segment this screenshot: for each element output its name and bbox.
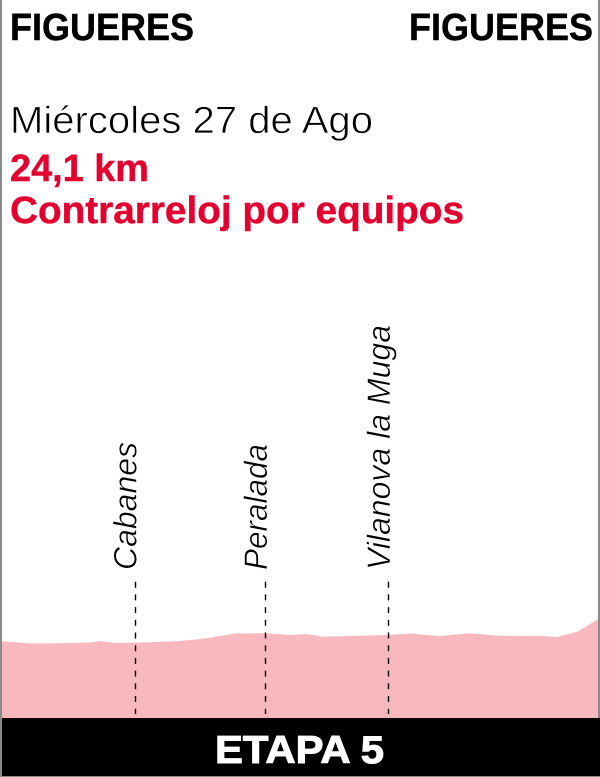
start town heading: FIGUERES [10,7,194,49]
stage type: Contrarreloj por equipos [10,190,464,232]
banner title: ETAPA 5 [215,729,384,772]
waypoint label: Cabanes: Cabanes [108,442,144,570]
stage banner [2,718,600,776]
finish town heading: FIGUERES [409,7,593,49]
date: Miércoles 27 de Ago [10,100,373,142]
waypoint label: Peralada: Peralada [238,444,274,570]
waypoint label: Vilanova la Muga: Vilanova la Muga [361,325,397,570]
stage distance: 24,1 km [10,148,149,190]
elevation profile area [2,619,598,718]
